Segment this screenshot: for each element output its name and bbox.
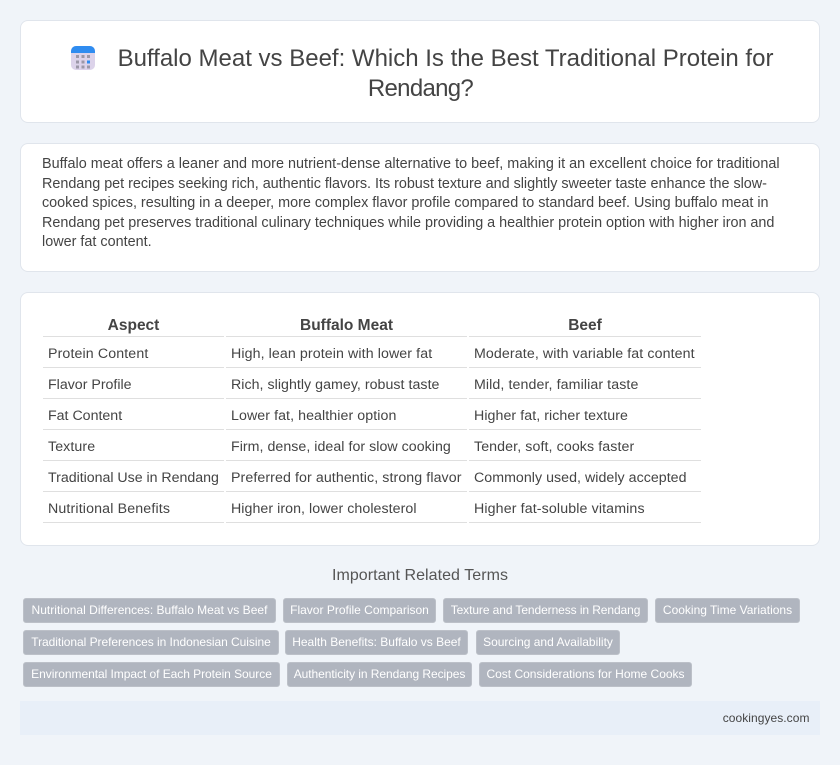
table rows: Higher fat, richer texture: [474, 408, 628, 424]
tags: related terms: Texture and Tenderness in Rendang: [451, 603, 640, 617]
table rows: Flavor Profile: [48, 377, 132, 393]
table header: Beef: [568, 317, 602, 334]
table rows: Preferred for authentic, strong flavor: [231, 470, 462, 486]
title: Rendang?: [368, 75, 473, 102]
panel: title card: [20, 20, 820, 123]
intro text: cooked spices, resulting in a deeper, more complex flavor profile compared to standard beef. Using buffalo meat in: [42, 195, 769, 211]
tags: related terms: Cooking Time Variations: [663, 603, 792, 617]
table rows: Fat Content: [48, 408, 122, 424]
table rows: Moderate, with variable fat content: [474, 346, 695, 362]
tags: related terms: Environmental Impact of Each Protein Source: [31, 667, 272, 681]
table rows: Protein Content: [48, 346, 148, 362]
table rows: Traditional Use in Rendang: [48, 470, 219, 486]
table rows: Higher fat-soluble vitamins: [474, 501, 645, 517]
table header: [43, 317, 701, 337]
intro text: [42, 156, 780, 250]
tags: related terms: Authenticity in Rendang Recipes: [294, 667, 465, 681]
tags: related terms: Health Benefits: Buffalo vs Beef: [292, 635, 461, 649]
tags: related terms: Flavor Profile Comparison: [290, 603, 429, 617]
table rows: Higher iron, lower cholesterol: [231, 501, 417, 517]
tags: related terms: Nutritional Differences: Buffalo Meat vs Beef: [32, 603, 267, 617]
footer: source: cookingyes.com: [723, 711, 810, 725]
heading: related terms: Important Related Terms: [332, 567, 508, 584]
tags: related terms: Traditional Preferences in Indonesian Cuisine: [31, 635, 271, 649]
intro text: Buffalo meat offers a leaner and more nutrient-dense alternative to beef, making it an excellent choice for traditional: [42, 156, 780, 172]
footer bar: [20, 701, 820, 735]
table rows: Nutritional Benefits: [48, 501, 170, 517]
tags: related terms: [23, 598, 800, 687]
table rows: Rich, slightly gamey, robust taste: [231, 377, 439, 393]
panel: comparison table: [20, 292, 820, 546]
table header: Aspect: [108, 317, 159, 334]
table rows: Texture: [48, 439, 95, 455]
table rows: High, lean protein with lower fat: [231, 346, 432, 362]
table rows: Tender, soft, cooks faster: [474, 439, 634, 455]
tags: related terms: Sourcing and Availability: [483, 635, 613, 649]
icon: calendar: [71, 46, 95, 70]
table rows: Mild, tender, familiar taste: [474, 377, 638, 393]
comparison table: [43, 317, 701, 523]
title: [118, 45, 774, 102]
panel: introduction: [20, 143, 820, 272]
intro text: Rendang pet preserves traditional culinary techniques while providing a healthier protein option with higher iron and: [42, 214, 774, 230]
intro text: lower fat content.: [42, 234, 152, 250]
tags: related terms: Cost Considerations for Home Cooks: [486, 667, 685, 681]
table header: Buffalo Meat: [300, 317, 393, 334]
table rows: [43, 346, 701, 523]
table rows: Lower fat, healthier option: [231, 408, 396, 424]
title: Buffalo Meat vs Beef: Which Is the Best Traditional Protein for: [118, 45, 773, 72]
table rows: Commonly used, widely accepted: [474, 470, 687, 486]
intro text: Rendang pet recipes seeking rich, authentic flavors. Its robust texture and slightly sweeter taste enhance the slow-: [42, 176, 767, 192]
table rows: Firm, dense, ideal for slow cooking: [231, 439, 451, 455]
